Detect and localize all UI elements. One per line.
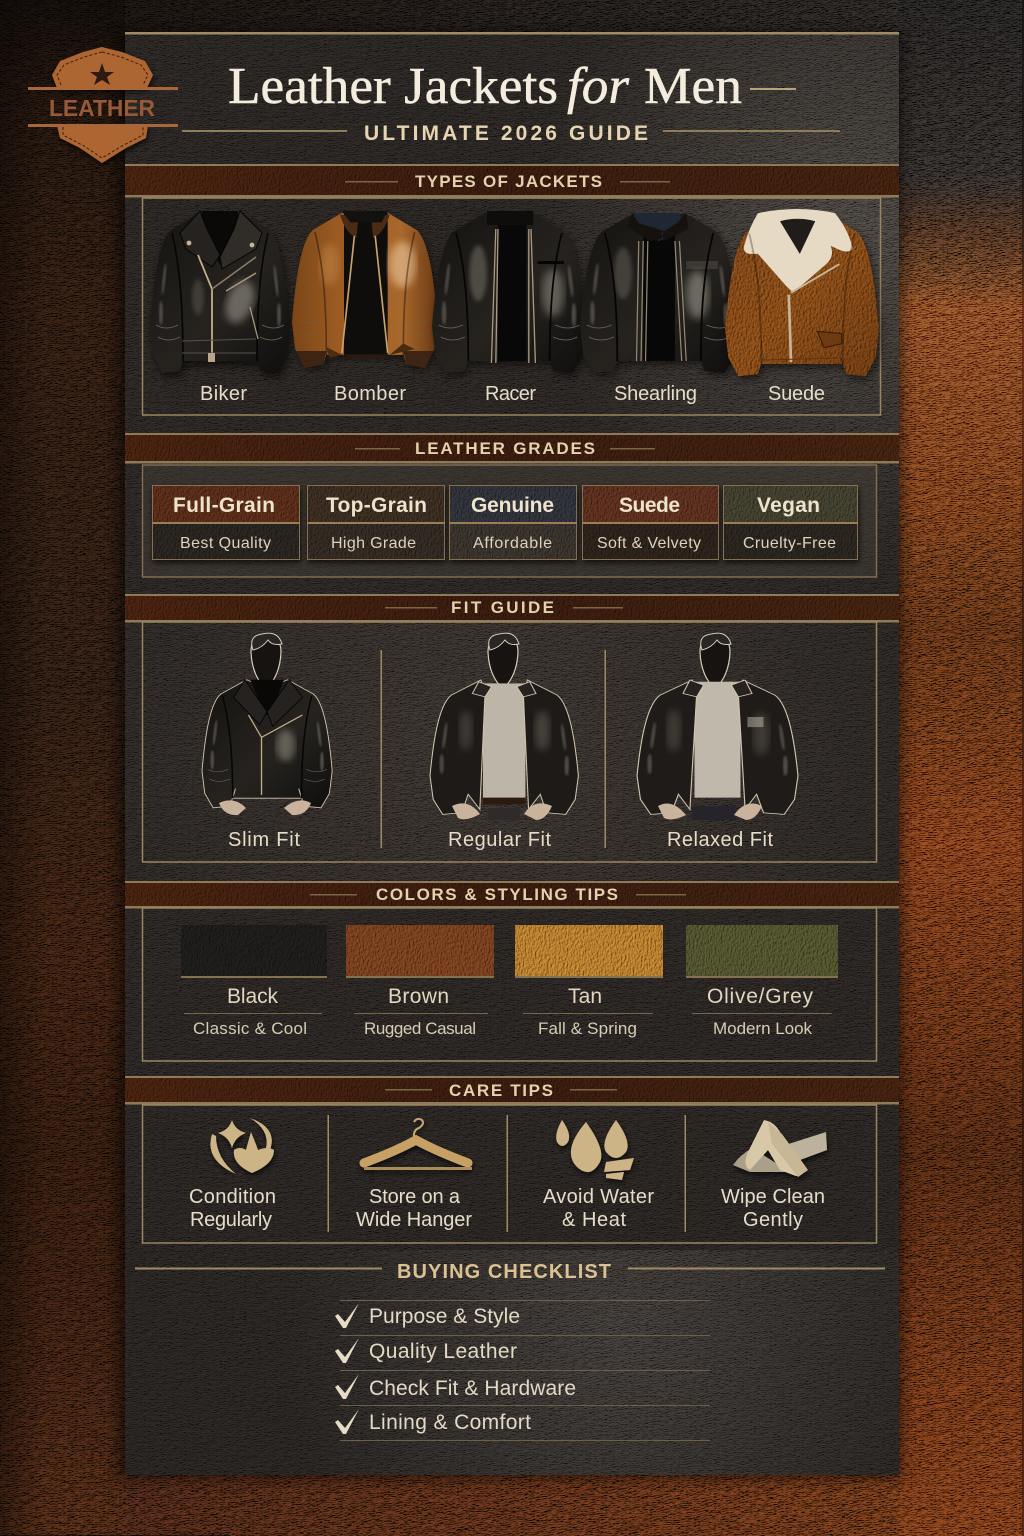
care labels: Regularly bbox=[190, 1209, 272, 1231]
figure: relaxed fit bbox=[637, 633, 798, 820]
swatch: black: Black bbox=[227, 985, 278, 1008]
swatch: black bbox=[181, 925, 327, 1038]
icon: water drops bbox=[556, 1120, 634, 1180]
care labels bbox=[189, 1186, 825, 1231]
care labels: & Heat bbox=[562, 1209, 626, 1231]
care labels: Condition bbox=[189, 1186, 276, 1208]
swatch: tan: Fall & Spring bbox=[538, 1019, 637, 1038]
checklist item: check fit and hardware: Check Fit & Hardware bbox=[369, 1377, 576, 1400]
fit labels: Relaxed Fit bbox=[667, 829, 773, 851]
icon: cleaning cloth bbox=[733, 1120, 827, 1177]
section header: fit guide: FIT GUIDE bbox=[451, 598, 555, 617]
section header: fit guide bbox=[125, 594, 899, 622]
panel: leather grades bbox=[142, 465, 876, 577]
grade card: vegan: Cruelty-Free bbox=[743, 535, 836, 552]
swatch: olive grey: Olive/Grey bbox=[707, 985, 814, 1008]
icon: condition bbox=[210, 1118, 274, 1174]
grade card: vegan bbox=[723, 485, 858, 560]
icon: hanger bbox=[364, 1119, 472, 1170]
fit labels bbox=[228, 829, 773, 851]
care labels: Avoid Water bbox=[543, 1186, 654, 1208]
care labels: Wide Hanger bbox=[356, 1209, 472, 1231]
care labels: Wipe Clean bbox=[721, 1186, 825, 1208]
grade card: vegan: Vegan bbox=[757, 494, 820, 517]
figure: slim fit bbox=[202, 633, 332, 815]
care labels: Store on a bbox=[369, 1186, 461, 1208]
jacket labels: Racer bbox=[485, 383, 536, 405]
jacket labels: Shearling bbox=[614, 383, 697, 405]
title: Leather Jackets bbox=[228, 58, 558, 115]
grade card: suede: Soft & Velvety bbox=[597, 535, 701, 552]
title: for bbox=[567, 58, 630, 115]
swatch: tan: Tan bbox=[568, 985, 602, 1008]
checklist item: purpose and style: Purpose & Style bbox=[369, 1305, 520, 1328]
swatch: black: Classic & Cool bbox=[193, 1019, 307, 1038]
section header: leather grades bbox=[125, 433, 899, 464]
swatch: brown bbox=[346, 925, 494, 1038]
jacket labels: Biker bbox=[200, 383, 247, 405]
jacket labels: Suede bbox=[768, 383, 825, 405]
section header: leather grades: LEATHER GRADES bbox=[415, 439, 596, 458]
icon: star bbox=[90, 63, 114, 85]
jacket: suede bbox=[725, 209, 881, 380]
swatch: tan bbox=[515, 925, 663, 1038]
panel: types of jackets bbox=[142, 198, 881, 415]
grade card: full-grain bbox=[152, 485, 300, 560]
title bbox=[228, 58, 796, 115]
swatch: brown: Rugged Casual bbox=[364, 1019, 476, 1038]
grade card: genuine bbox=[449, 485, 577, 560]
panel: fit guide bbox=[142, 622, 876, 862]
checklist item: quality leather: Quality Leather bbox=[369, 1340, 517, 1363]
heading: buying checklist: BUYING CHECKLIST bbox=[397, 1261, 611, 1283]
section header: colors and styling tips bbox=[125, 881, 899, 908]
jacket: biker bbox=[150, 211, 292, 378]
logo badge bbox=[28, 47, 178, 163]
jacket labels: Bomber bbox=[334, 383, 406, 405]
jacket labels bbox=[200, 383, 825, 405]
grade card: genuine: Affordable bbox=[473, 535, 552, 552]
grade card: full-grain: Best Quality bbox=[180, 535, 271, 552]
checklist bbox=[335, 1300, 710, 1440]
grade card: top-grain bbox=[307, 485, 445, 560]
jacket: shearling label, black racer bbox=[580, 213, 740, 377]
grade card: top-grain: Top-Grain bbox=[326, 494, 427, 517]
swatch: olive grey bbox=[686, 925, 838, 1038]
fit labels: Slim Fit bbox=[228, 829, 300, 851]
title: Men bbox=[644, 58, 742, 115]
swatch: olive grey: Modern Look bbox=[713, 1019, 812, 1038]
section header: colors and styling tips: COLORS & STYLING TIPS bbox=[376, 885, 619, 904]
panel: care tips bbox=[142, 1105, 876, 1243]
lapels bbox=[180, 211, 220, 267]
care labels: Gently bbox=[743, 1209, 803, 1231]
grade card: full-grain: Full-Grain bbox=[173, 494, 275, 517]
logo wordmark: LEATHER bbox=[49, 95, 155, 121]
main panel bbox=[111, 28, 912, 1486]
subtitle: ULTIMATE 2026 GUIDE bbox=[364, 122, 648, 145]
section header: care tips: CARE TIPS bbox=[449, 1081, 554, 1100]
jacket: bomber bbox=[292, 211, 440, 370]
swatch: brown: Brown bbox=[388, 985, 449, 1008]
panel: colors and styling tips bbox=[142, 908, 876, 1061]
grade card: suede bbox=[582, 485, 719, 560]
figure: regular fit bbox=[430, 633, 578, 820]
fit labels: Regular Fit bbox=[448, 829, 551, 851]
checklist item: lining and comfort: Lining & Comfort bbox=[369, 1411, 531, 1434]
grade card: genuine: Genuine bbox=[471, 494, 554, 517]
section header: types of jackets: TYPES OF JACKETS bbox=[415, 172, 603, 191]
section header: types of jackets bbox=[125, 164, 899, 198]
grade card: top-grain: High Grade bbox=[331, 535, 416, 552]
jacket: racer bbox=[432, 211, 588, 377]
section header: care tips bbox=[125, 1076, 899, 1104]
grade card: suede: Suede bbox=[619, 494, 680, 517]
